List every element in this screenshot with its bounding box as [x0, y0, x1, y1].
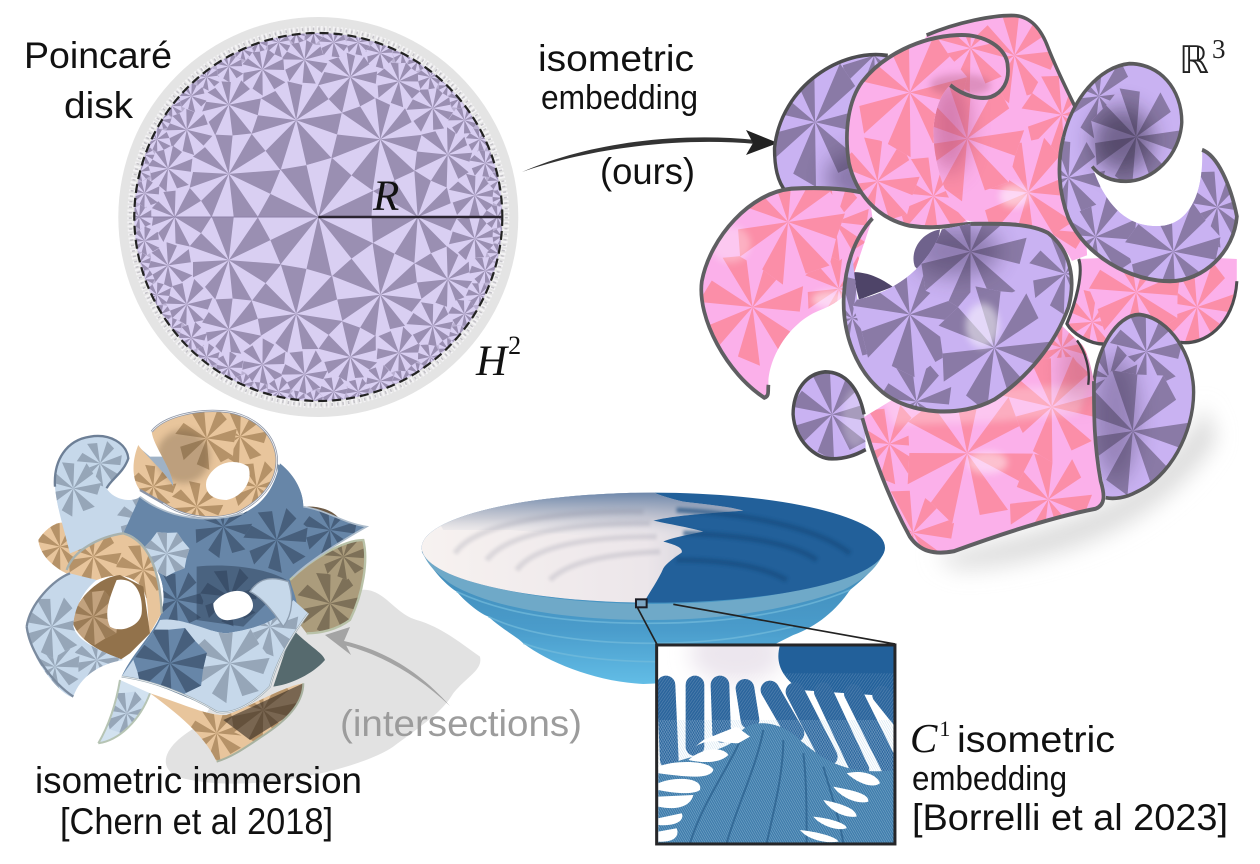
center hole: [213, 591, 253, 620]
panel: isometric embedding surface: [694, 0, 1255, 585]
tan middle loop: [66, 532, 163, 633]
small purple lobe: [791, 370, 866, 461]
label: C1 isometric embedding: isometric: [957, 719, 1115, 760]
back right sheet: [277, 463, 343, 537]
tan inner loop: [74, 575, 150, 660]
zoom locator square: [636, 599, 647, 607]
tan top loop: [134, 410, 278, 518]
heading: isometric embedding (ours): (ours): [600, 151, 695, 192]
label: C1 isometric embedding: [Borrelli et al 2023]: [912, 797, 1228, 838]
label: intersections: (intersections): [340, 703, 582, 744]
lower pink sheet: [860, 326, 1106, 555]
right olive sheet: [289, 538, 366, 634]
back purple lobe: [772, 52, 888, 190]
left pink sheet: [699, 186, 872, 400]
blue upper left sheet: [54, 434, 140, 554]
right pink sheet: [1065, 258, 1238, 346]
small blue flap: [250, 579, 292, 627]
arrow: intersections pointer: [325, 627, 450, 706]
label: Poincaré disk: [24, 35, 172, 126]
bowl outer body: [422, 548, 885, 684]
label: R cubed: ℝ: [1179, 38, 1209, 82]
label: C1 isometric embedding: [910, 715, 1228, 838]
label: C1 isometric embedding: C: [910, 715, 937, 761]
left hole: [107, 580, 142, 629]
label: H squared: H: [476, 338, 507, 385]
label: H squared: 2: [508, 331, 521, 360]
heading: isometric embedding (ours): isometric: [538, 38, 694, 79]
label: C1 isometric embedding: embedding: [912, 760, 1067, 798]
white lobes: [658, 727, 880, 842]
blue lower left sheet: [26, 572, 123, 698]
panel: Poincaré disk H2: [108, 13, 518, 422]
front blue light sheet: [120, 594, 310, 713]
bottom tan sheet: [150, 683, 304, 762]
panel: C1 corrugated bowl: [420, 490, 895, 684]
lower fan: [658, 723, 895, 844]
heading: isometric embedding (ours): embedding: [541, 79, 698, 117]
label: isometric immersion: isometric immersion: [35, 760, 362, 801]
label: Poincaré disk: disk: [64, 85, 134, 126]
back purple fragments behind gap: [852, 229, 940, 300]
top edge of blue body: [140, 497, 367, 577]
arrow: disk to embedding: [522, 130, 778, 172]
tan back left: [38, 522, 82, 574]
front pink flap: [845, 33, 1010, 230]
panel: zoom inset of corrugations: [657, 623, 902, 844]
upper ribs: [666, 685, 902, 770]
back pink sheet: [925, 14, 1087, 261]
panel: isometric immersion: [15, 403, 480, 784]
label: C1 isometric embedding: 1: [939, 716, 950, 741]
inset border: [657, 645, 895, 844]
small blue piece behind tan loop: [138, 447, 174, 493]
heading: isometric embedding (ours): [538, 38, 698, 192]
intersections shadow: [166, 590, 480, 784]
label: R cubed: [1179, 34, 1226, 82]
zoom connector lines: [638, 604, 895, 645]
bowl interior: [420, 490, 887, 603]
label: Poincaré disk: Poincaré: [24, 35, 172, 76]
label: isometric immersion: [35, 760, 362, 842]
label: R cubed: 3: [1212, 34, 1226, 64]
small blue tip: [98, 680, 151, 744]
bowl steps: [457, 590, 850, 662]
central purple funnel: [842, 216, 1074, 414]
bowl rim band: [422, 548, 885, 620]
ground shadow: [933, 407, 1217, 568]
lower right dark sheet: [273, 630, 325, 687]
label: isometric immersion: [Chern et al 2018]: [60, 801, 333, 842]
right purple funnel: [1058, 62, 1239, 284]
inset background: [658, 646, 770, 682]
blue main dark body: [120, 460, 370, 713]
label: R: R: [372, 173, 399, 220]
right lower purple lobe: [1093, 312, 1196, 500]
